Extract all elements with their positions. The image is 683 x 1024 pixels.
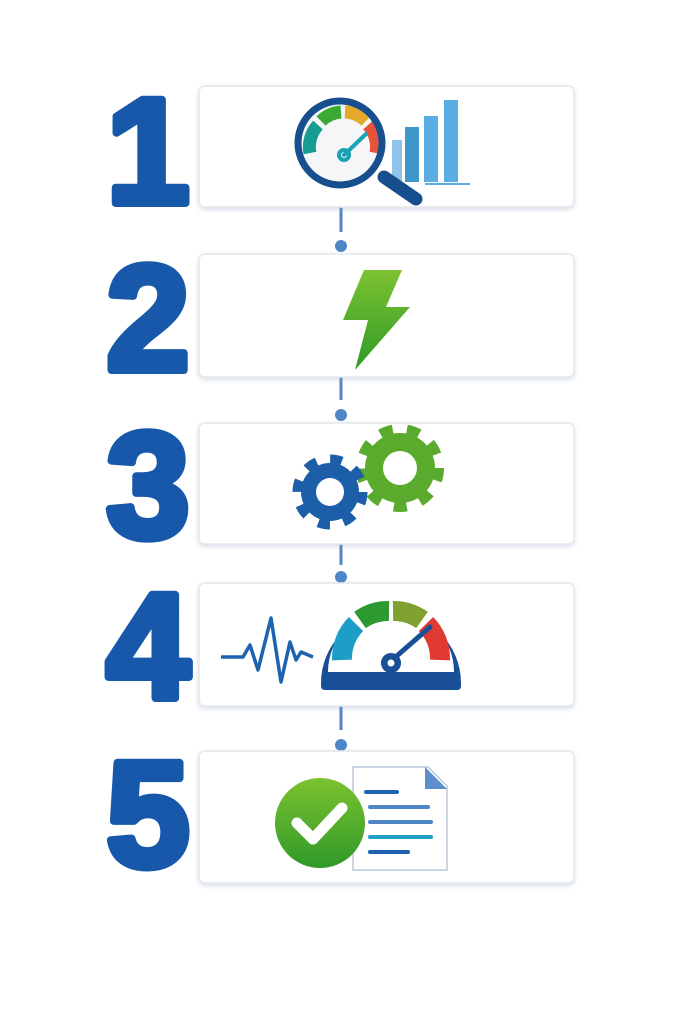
step numbers: 5: [106, 730, 190, 898]
step numbers: 2: [106, 234, 190, 402]
step numbers: 1: [106, 67, 190, 235]
step cards: [199, 86, 574, 883]
icon: magnifier gauge with bars: [298, 100, 470, 199]
step numbers: 3: [106, 401, 190, 569]
icon: gears: [297, 429, 439, 525]
icon: pulse and speedometer: [221, 609, 461, 690]
connector line: [340, 207, 342, 730]
icon: lightning bolt: [343, 270, 410, 370]
icon: checkmark and document: [275, 767, 447, 870]
connector dots: [335, 240, 347, 751]
step numbers: [106, 67, 190, 898]
step numbers: 4: [106, 562, 190, 730]
